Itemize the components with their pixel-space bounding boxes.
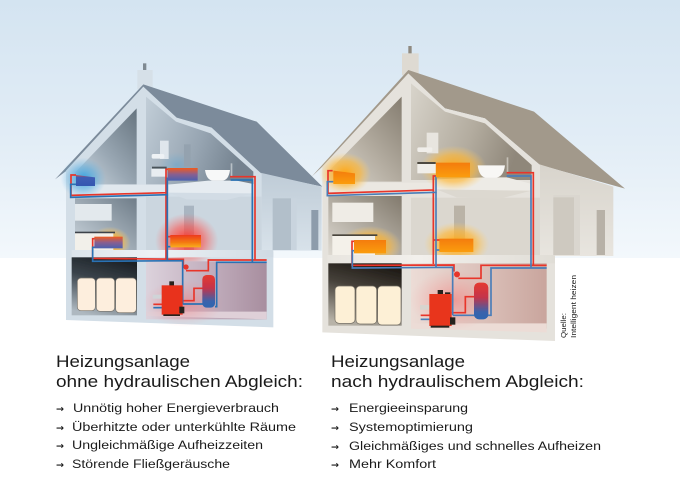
list: right benefits: Energieeinsparung xyxy=(349,401,468,415)
list: left drawbacks: Störende Fließgeräusche xyxy=(72,457,230,471)
boiler room floor xyxy=(411,323,547,332)
chimney xyxy=(137,63,153,89)
list: left drawbacks: → xyxy=(56,441,64,452)
list: right benefits: → xyxy=(331,460,339,471)
room: attic left xyxy=(328,97,402,182)
room: boiler room xyxy=(411,263,547,329)
room: middle right xyxy=(146,197,262,250)
radiator: attic left xyxy=(333,171,355,184)
radiator: kitchen xyxy=(354,240,386,253)
sky background xyxy=(0,0,680,258)
glow: overheated room xyxy=(155,213,218,268)
list: right benefits: → xyxy=(331,404,339,415)
glow: warm kitchen xyxy=(89,227,131,259)
glow: attic left xyxy=(319,153,371,194)
house: after hydraulic balancing xyxy=(312,46,625,341)
list: right benefits: Gleichmäßiges und schnelles Aufheizen xyxy=(349,439,601,453)
radiator: cold attic xyxy=(76,175,95,186)
radiator: bathroom xyxy=(436,163,470,177)
bathroom fittings xyxy=(417,133,508,178)
list: left drawbacks: → xyxy=(56,404,64,415)
room: cellar left xyxy=(328,263,402,326)
lower floor slab xyxy=(72,250,273,257)
list: right benefits: Systemoptimierung xyxy=(349,420,473,434)
list: left drawbacks: Unnötig hoher Energieverbrauch xyxy=(73,401,279,415)
glow: bathroom xyxy=(420,146,487,191)
glow: bathroom xyxy=(158,152,195,178)
list: right benefits: → xyxy=(331,442,339,453)
hot water tank xyxy=(474,283,488,319)
text block: left heading: ohne hydraulischen Abgleich: xyxy=(56,372,303,391)
room: middle left xyxy=(328,196,402,255)
radiator: bathroom xyxy=(168,168,198,181)
list: right benefits: → xyxy=(331,423,339,434)
oil tanks xyxy=(335,286,401,325)
source note: Quelle: xyxy=(559,313,568,338)
text block: right heading: Heizungsanlage xyxy=(331,352,465,371)
glow: cold room xyxy=(61,158,106,199)
source note xyxy=(559,275,578,338)
list: left drawbacks: Überhitzte oder unterkühlte Räume xyxy=(72,420,296,434)
pipes: supply red xyxy=(71,169,267,304)
list: right benefits xyxy=(331,401,601,471)
bathroom fittings xyxy=(151,141,232,181)
list: left drawbacks: → xyxy=(56,460,64,471)
side wall with doors xyxy=(260,173,322,251)
pump xyxy=(183,264,189,270)
source note: Intelligent heizen xyxy=(569,275,578,338)
upper floor slab xyxy=(72,181,253,200)
lower floor slab xyxy=(327,255,555,263)
upper floor slab xyxy=(327,177,532,199)
pipes: return blue xyxy=(327,176,547,319)
list: left drawbacks: → xyxy=(56,423,64,434)
radiator: overheated room xyxy=(170,235,201,247)
house: without hydraulic balancing xyxy=(55,63,322,327)
column xyxy=(454,206,465,242)
glow: living room xyxy=(424,222,489,266)
column xyxy=(184,206,194,250)
oil tanks xyxy=(77,278,136,313)
list: left drawbacks xyxy=(56,401,296,471)
building cross-section xyxy=(66,87,273,327)
glow: boiler xyxy=(410,270,497,330)
room: middle left xyxy=(75,198,137,250)
glow: kitchen xyxy=(338,226,402,266)
room: attic right xyxy=(411,83,532,180)
text block: right heading xyxy=(331,352,584,391)
boiler xyxy=(153,281,184,316)
roof xyxy=(55,84,322,187)
chimney xyxy=(402,46,419,75)
hot water tank xyxy=(202,275,215,308)
text block: right heading: nach hydraulischem Abgleich: xyxy=(331,372,584,391)
pipes: return blue xyxy=(71,178,267,308)
building cross-section xyxy=(322,73,555,341)
pipes: supply red xyxy=(328,171,547,315)
text block: left heading: Heizungsanlage xyxy=(56,352,190,371)
room: attic right xyxy=(146,97,253,184)
boiler xyxy=(420,290,455,328)
roof xyxy=(312,70,625,189)
kitchen fittings xyxy=(332,203,377,255)
glow: boiler xyxy=(143,280,223,327)
list: right benefits: Mehr Komfort xyxy=(349,457,437,471)
boiler room floor xyxy=(146,312,267,319)
kitchen fittings xyxy=(75,204,115,250)
side wall with doors xyxy=(538,164,613,256)
room: boiler room xyxy=(146,261,267,319)
room: cellar left xyxy=(72,257,137,315)
text block: left heading xyxy=(56,352,303,391)
list: left drawbacks: Ungleichmäßige Aufheizzeiten xyxy=(72,438,263,452)
room: attic left xyxy=(75,108,137,184)
radiator: kitchen xyxy=(94,237,123,248)
pump xyxy=(454,271,460,277)
radiator: living room xyxy=(439,239,473,252)
room: middle right xyxy=(411,198,540,255)
